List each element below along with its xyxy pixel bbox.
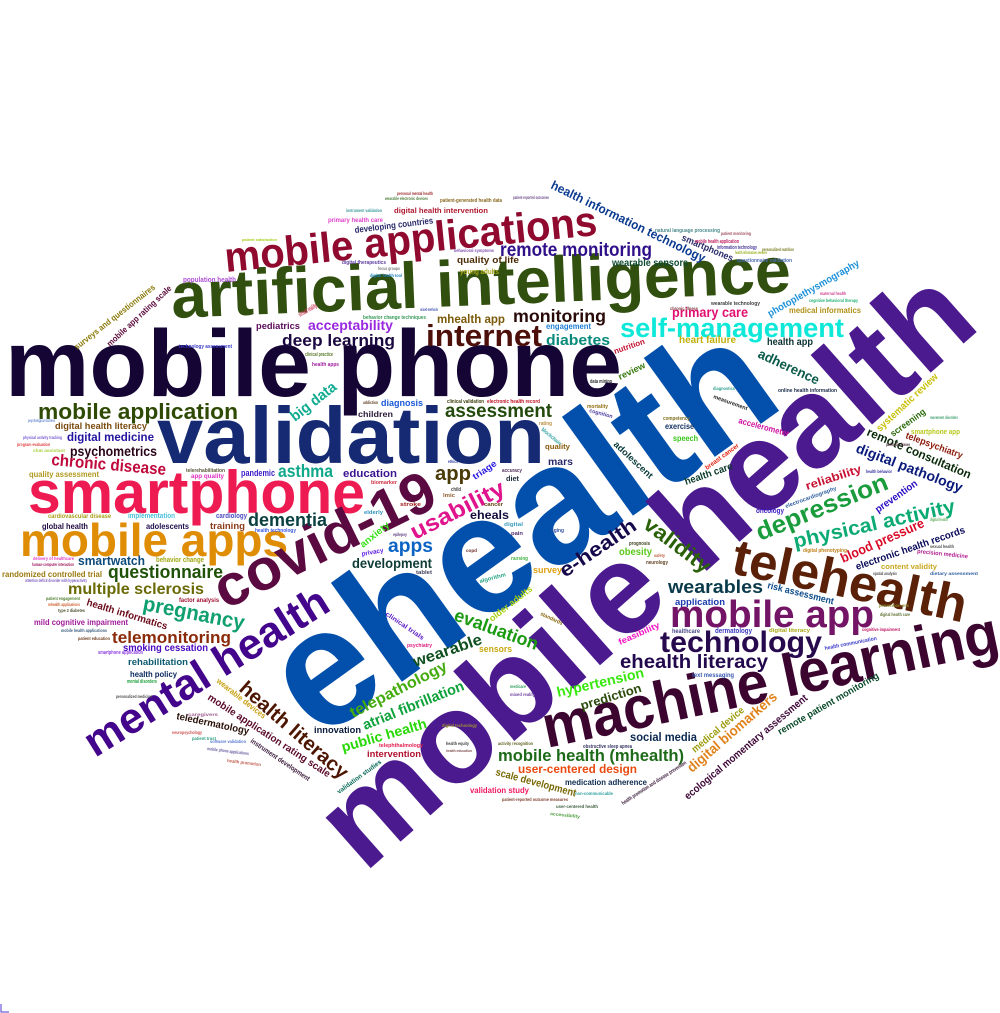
word: social media: social media [630, 730, 697, 744]
top cluster of keywords: clinical practice [305, 352, 333, 358]
right cluster of keywords: content validity [881, 562, 938, 571]
word: mobile phone: mobile phone [5, 311, 622, 417]
right cluster of keywords: accelerometer [737, 415, 791, 439]
word: atrial fibrillation: atrial fibrillation [361, 678, 467, 734]
top cluster of keywords: wearable electronic devices [384, 196, 428, 201]
left cluster of keywords: patient trust [192, 736, 216, 741]
top cluster of keywords: questionnaire validation [737, 258, 793, 264]
top cluster of keywords: mhealth app [437, 312, 505, 326]
right cluster of keywords: cognitive behavioral therapy [809, 298, 858, 303]
left cluster of keywords: big data [287, 378, 340, 425]
top cluster of keywords: patient monitoring [721, 231, 751, 236]
left cluster of keywords: questionnaire [108, 562, 223, 582]
left cluster of keywords: mobile app rating scale [105, 283, 174, 348]
centre cluster of keywords: sensors [479, 644, 512, 654]
left cluster of keywords: software validation [210, 739, 246, 744]
word: ehealth literacy: ehealth literacy [620, 652, 768, 673]
centre cluster of keywords: adolescent [612, 439, 655, 481]
centre cluster of keywords: psychiatry [407, 643, 433, 649]
left cluster of keywords: implementation [128, 513, 175, 520]
left cluster of keywords: global health [42, 522, 88, 531]
right cluster of keywords: health behavior [866, 469, 892, 474]
left cluster of keywords: delivery of healthcare [33, 556, 75, 561]
left cluster of keywords: telerehabilitation [186, 468, 225, 474]
word: hypertension: hypertension [555, 664, 645, 700]
word: medication adherence: medication adherence [565, 777, 647, 787]
left cluster of keywords: pediatrics [256, 321, 300, 332]
right cluster of keywords: dietary assessment [930, 571, 979, 576]
word: digital biomarkers: digital biomarkers [683, 688, 780, 775]
centre cluster of keywords: cancer [484, 502, 504, 508]
right cluster of keywords: healthcare [672, 629, 701, 635]
left cluster of keywords: technology assessment [179, 344, 232, 350]
top cluster of keywords: diabetes [546, 333, 610, 349]
left cluster of keywords: chat assistant [33, 448, 66, 453]
right cluster of keywords: parkinson disease [886, 442, 910, 447]
left cluster of keywords: health informatics [85, 597, 169, 633]
left cluster of keywords: teledermatology [175, 711, 250, 737]
centre cluster of keywords: aging [551, 528, 564, 534]
word: validation: validation [157, 391, 545, 480]
centre cluster of keywords: health education [446, 748, 472, 753]
right cluster of keywords: remote consultation [865, 425, 973, 482]
top cluster of keywords: digital health intervention [394, 206, 488, 215]
left cluster of keywords: training [210, 521, 245, 532]
left cluster of keywords: cardiovascular disease [48, 513, 111, 520]
top cluster of keywords: young adults [460, 269, 499, 276]
left cluster of keywords: program evaluation [17, 442, 50, 447]
right cluster of keywords: telepsychiatry [904, 430, 965, 462]
left cluster of keywords: mobile health applications [61, 628, 107, 633]
centre cluster of keywords: elderly [364, 510, 384, 516]
left cluster of keywords: app quality [191, 473, 224, 480]
word: physical activity: physical activity [791, 495, 958, 553]
centre cluster of keywords: app [435, 463, 471, 485]
top cluster of keywords: nutrition [613, 337, 646, 356]
right cluster of keywords: blood pressure [838, 515, 927, 566]
top cluster of keywords: photoplethysmography [766, 258, 862, 320]
top cluster of keywords: digital health tool [370, 273, 402, 278]
word: ehealth: ehealth [229, 281, 808, 771]
top cluster of keywords: personalized nutrition [762, 247, 794, 252]
top cluster of keywords [282, 178, 862, 382]
top cluster of keywords: quality of life [457, 255, 519, 266]
centre cluster of keywords [314, 379, 690, 819]
top cluster of keywords: health apps [312, 362, 339, 368]
centre cluster of keywords: nursing [511, 556, 528, 562]
left cluster of keywords: mobile phone applications [207, 746, 250, 756]
centre cluster of keywords: accuracy [502, 468, 522, 474]
right cluster of keywords: dermatology [715, 628, 752, 635]
left cluster of keywords: smartwatch [78, 554, 145, 568]
centre cluster of keywords: neurology [646, 560, 668, 566]
right cluster of keywords: digital health care [880, 612, 910, 617]
centre cluster of keywords: survey [533, 565, 563, 576]
right cluster of keywords [665, 291, 979, 679]
centre cluster of keywords: digital technology [442, 723, 477, 728]
right cluster of keywords: breast cancer [704, 442, 741, 472]
word: telehealth: telehealth [728, 528, 972, 633]
centre cluster of keywords: development [352, 556, 432, 571]
top cluster of keywords: personal mental health [397, 191, 433, 196]
word: public health: public health [339, 715, 428, 755]
right cluster of keywords: adherence [756, 346, 822, 388]
left cluster of keywords: multiple sclerosis [68, 581, 204, 598]
top cluster of keywords: review [616, 360, 648, 382]
left cluster of keywords: factor analysis [179, 597, 219, 604]
word: mobile applications: mobile applications [222, 197, 599, 281]
word: artificial intelligence: artificial intelligence [170, 233, 792, 332]
left cluster of keywords: behavior change [156, 557, 204, 564]
word: validity: validity [639, 513, 715, 578]
right cluster of keywords: digital phenotyping [803, 548, 847, 554]
left cluster of keywords: mobile application rating scale [205, 692, 332, 780]
word: mental health: mental health [75, 577, 338, 766]
right cluster of keywords: maternal health [820, 291, 846, 296]
centre cluster of keywords: digital [504, 522, 524, 528]
left cluster of keywords: caregivers [188, 712, 219, 717]
word: mobile health (mhealth): mobile health (mhealth) [498, 747, 684, 765]
word: health literacy: health literacy [235, 677, 353, 784]
word: e-health: e-health [555, 515, 641, 582]
top cluster of keywords: primary care [672, 304, 748, 320]
right cluster of keywords: digital literacy [769, 628, 811, 634]
word: mobile apps: mobile apps [20, 514, 288, 566]
top cluster of keywords: mixed-methods [420, 307, 438, 312]
top cluster of keywords: virtual reality [298, 303, 318, 319]
centre cluster of keywords: eheals [470, 508, 509, 522]
left cluster of keywords: quality assessment [29, 469, 99, 479]
left cluster of keywords: instrument development [249, 738, 311, 783]
top cluster of keywords: wearable sensors [611, 258, 688, 269]
word: covid-19: covid-19 [202, 458, 446, 622]
right cluster of keywords: electrocardiography [785, 485, 838, 510]
right cluster of keywords: sexual health [930, 544, 954, 549]
left cluster of keywords: health promotion [227, 758, 261, 767]
left cluster of keywords: rehabilitation [128, 657, 188, 668]
centre cluster of keywords: privacy [361, 547, 384, 558]
left cluster of keywords: neuropsychology [172, 730, 202, 735]
left cluster of keywords: patient satisfaction [242, 237, 278, 242]
left cluster of keywords: mobile application [38, 399, 238, 424]
centre cluster of keywords: epilepsy [393, 532, 407, 537]
centre cluster of keywords: patient-reported outcome measures [502, 797, 568, 802]
left cluster of keywords: health policy [130, 670, 178, 679]
left cluster of keywords: personalized medicine [116, 694, 152, 699]
top cluster of keywords: instrument validation [346, 208, 382, 213]
right cluster of keywords: text messaging [692, 672, 734, 679]
top cluster of keywords: monitoring [513, 306, 606, 326]
centre cluster of keywords: mars [548, 457, 573, 468]
word: technology: technology [660, 626, 822, 659]
right cluster of keywords: smartphone app [911, 427, 960, 436]
left cluster of keywords: type 2 diabetes [58, 608, 85, 613]
word: scale development: scale development [494, 766, 578, 799]
right cluster of keywords: digital health [930, 517, 948, 522]
right cluster of keywords: online health information [778, 388, 837, 394]
left cluster of keywords: attention deficit disorder with hyperactivity [25, 578, 87, 583]
right cluster of keywords: health care [683, 461, 735, 488]
centre cluster of keywords: older adults [487, 584, 534, 624]
word: evaluation: evaluation [452, 605, 541, 654]
centre cluster of keywords: health promotion and disease prevention [621, 760, 688, 807]
top cluster of keywords: mobile health application [695, 239, 739, 245]
word: remote patient monitoring: remote patient monitoring [776, 670, 881, 738]
left cluster of keywords: validation studies [336, 759, 383, 796]
top cluster of keywords: remote monitoring [500, 240, 652, 261]
word: medical device: medical device [690, 705, 747, 755]
right cluster of keywords: application [675, 597, 725, 608]
top cluster of keywords: health information technology [549, 178, 708, 265]
left cluster of keywords: mild cognitive impairment [34, 617, 128, 627]
centre cluster of keywords: activity recognition [498, 741, 533, 746]
centre cluster of keywords: copd [466, 548, 477, 553]
right cluster of keywords: speech [673, 433, 698, 443]
top cluster of keywords: chronic illness [670, 306, 698, 311]
right cluster of keywords: health communication [824, 636, 878, 652]
centre cluster of keywords: child [451, 487, 461, 493]
left cluster of keywords: psychological distress [28, 418, 55, 423]
centre cluster of keywords: standards [539, 611, 563, 627]
right cluster of keywords: movement disorders [930, 415, 958, 420]
centre cluster of keywords: apps [388, 535, 433, 557]
left cluster of keywords: mental disorders [127, 679, 157, 685]
left cluster of keywords: digital medicine [67, 432, 154, 444]
centre cluster of keywords: obstructive sleep apnea [583, 744, 632, 750]
centre cluster of keywords: intervention [367, 749, 421, 760]
top cluster of keywords: behavior change techniques [363, 315, 426, 321]
right cluster of keywords: diagnostics [713, 386, 735, 391]
right cluster of keywords: oncology [756, 508, 784, 515]
centre cluster of keywords: mixed reality [510, 692, 535, 697]
right cluster of keywords: electronic health records [854, 525, 967, 573]
centre cluster of keywords: ethics [448, 459, 458, 464]
left cluster of keywords: pandemic [241, 468, 275, 478]
centre cluster of keywords: cognition [588, 408, 614, 420]
top cluster of keywords: engagement [546, 321, 591, 331]
centre cluster of keywords: rating [539, 421, 552, 427]
top cluster of keywords: behavioral symptoms [454, 248, 494, 253]
left cluster of keywords: pregnancy [141, 592, 247, 635]
top cluster of keywords: medical informatics [789, 306, 862, 315]
centre cluster of keywords: electronic health record [487, 399, 540, 405]
centre cluster of keywords: obesity [619, 547, 652, 558]
right cluster of keywords: digital pathology [854, 440, 965, 495]
right cluster of keywords: cognitive impairment [862, 627, 900, 632]
right cluster of keywords: reliability [804, 463, 864, 493]
word: mobile health: mobile health [288, 241, 1000, 895]
top cluster of keywords: primary health care [328, 217, 383, 224]
centre cluster of keywords: prognosis [629, 541, 650, 547]
centre cluster of keywords: medicare [510, 684, 526, 689]
centre cluster of keywords: telephthalmology [379, 743, 424, 749]
centre cluster of keywords: diagnosis [381, 398, 423, 409]
centre cluster of keywords: clinical validation [447, 399, 484, 405]
left cluster of keywords: randomized controlled trial [2, 570, 102, 579]
centre cluster of keywords: non-communicable [575, 791, 613, 796]
right cluster of keywords: screening [888, 406, 927, 439]
left cluster of keywords: physical activity tracking [23, 435, 62, 440]
right cluster of keywords: risk assessment [766, 580, 836, 608]
left cluster of keywords [2, 237, 383, 796]
top cluster of keywords: smartphones [680, 233, 735, 264]
word: mobile app: mobile app [670, 594, 874, 636]
left cluster of keywords: patient education [78, 636, 110, 641]
top cluster of keywords: deep learning [282, 331, 395, 350]
top cluster of keywords: wearable technology [710, 301, 760, 307]
top cluster of keywords: patient-reported outcomes [513, 195, 549, 200]
top cluster of keywords: digital therapeutics [342, 260, 386, 266]
word: wearables: wearables [667, 576, 763, 597]
centre cluster of keywords: safety [654, 553, 665, 558]
left cluster of keywords: health technology [255, 528, 297, 534]
centre cluster of keywords: stroke [400, 502, 421, 508]
word: validation study: validation study [470, 786, 530, 795]
centre cluster of keywords: tablet [416, 570, 432, 576]
centre cluster of keywords: data mining [590, 379, 612, 385]
top cluster of keywords: health information seekers [735, 250, 767, 255]
word: telepathology: telepathology [347, 658, 451, 722]
centre cluster of keywords: mortality [587, 404, 609, 410]
centre cluster of keywords: pain [511, 531, 524, 537]
corner mark [1, 1004, 9, 1012]
centre cluster of keywords: children [358, 409, 393, 419]
left cluster of keywords: cardiology [216, 513, 247, 520]
right cluster of keywords: measurement [712, 394, 748, 412]
top cluster of keywords: acceptability [308, 317, 393, 333]
centre cluster of keywords: assessment [445, 401, 553, 422]
word: user-centered design: user-centered design [518, 762, 637, 776]
centre cluster of keywords: lmic [443, 493, 455, 499]
centre cluster of keywords: accessibility [550, 811, 581, 819]
centre cluster of keywords: health equity [446, 741, 469, 746]
centre cluster of keywords: user-centered health [556, 804, 598, 809]
right cluster of keywords: spatial analysis [873, 571, 897, 576]
centre cluster of keywords: innovation [314, 725, 361, 736]
left cluster of keywords: surveys and questionnaires [72, 282, 157, 352]
top cluster of keywords: natural language processing [655, 228, 720, 234]
top cluster of keywords: developing countries [354, 215, 434, 235]
centre cluster of keywords: biomarker [371, 480, 398, 486]
centre cluster of keywords: algorithm [479, 572, 507, 585]
left cluster of keywords: human-computer interaction [32, 562, 74, 567]
word: self-management: self-management [620, 313, 844, 343]
right cluster of keywords: systematic review [875, 371, 941, 434]
right cluster of keywords: prevention [873, 478, 920, 515]
centre cluster of keywords: quality [545, 442, 571, 451]
left cluster of keywords: telemonitoring [112, 629, 231, 647]
word: depression: depression [752, 468, 892, 547]
word: usability: usability [405, 474, 509, 544]
centre cluster of keywords: anxiety [358, 519, 393, 550]
centre cluster of keywords: education [343, 468, 397, 480]
left cluster of keywords: chronic disease [51, 451, 167, 479]
left cluster of keywords: patient engagement [46, 596, 80, 601]
left cluster of keywords: smartphone application [98, 650, 143, 656]
centre cluster of keywords: diet [506, 476, 520, 483]
right cluster of keywords: exercise [665, 422, 694, 431]
centre cluster of keywords: competency [663, 416, 690, 422]
word: prediction: prediction [579, 681, 643, 713]
top cluster of keywords: information technology [717, 245, 757, 251]
left cluster of keywords: wearable devices [214, 676, 268, 721]
word: wearable: wearable [410, 631, 485, 671]
word: smartphone: smartphone [28, 459, 365, 526]
top cluster of keywords: focus groups [378, 266, 400, 271]
left cluster of keywords: adolescents [146, 521, 189, 531]
right cluster of keywords: prevention mix [879, 603, 909, 608]
centre cluster of keywords: feasibility [617, 620, 661, 647]
centre cluster of keywords: blockchain [540, 427, 562, 447]
top cluster of keywords: patient-generated health data [440, 198, 502, 204]
left cluster of keywords: mhealth applications [48, 602, 80, 607]
left cluster of keywords: digital health literacy [55, 421, 147, 431]
centre cluster of keywords: addiction [363, 400, 378, 405]
left cluster of keywords: smoking cessation [123, 642, 208, 654]
right cluster of keywords: precision medicine [917, 549, 969, 560]
word: internet: internet [426, 318, 542, 353]
word: ecological momentary assessment: ecological momentary assessment [682, 692, 811, 802]
top cluster of keywords: heart failure [679, 335, 736, 346]
left cluster of keywords: psychometrics [70, 443, 157, 459]
centre cluster of keywords: triage [471, 458, 499, 482]
top cluster of keywords: health app [767, 337, 813, 348]
left cluster of keywords: dementia [248, 509, 328, 530]
left cluster of keywords: population health [183, 277, 236, 284]
left cluster of keywords: asthma [278, 461, 333, 481]
centre cluster of keywords: clinical trials [384, 611, 425, 642]
